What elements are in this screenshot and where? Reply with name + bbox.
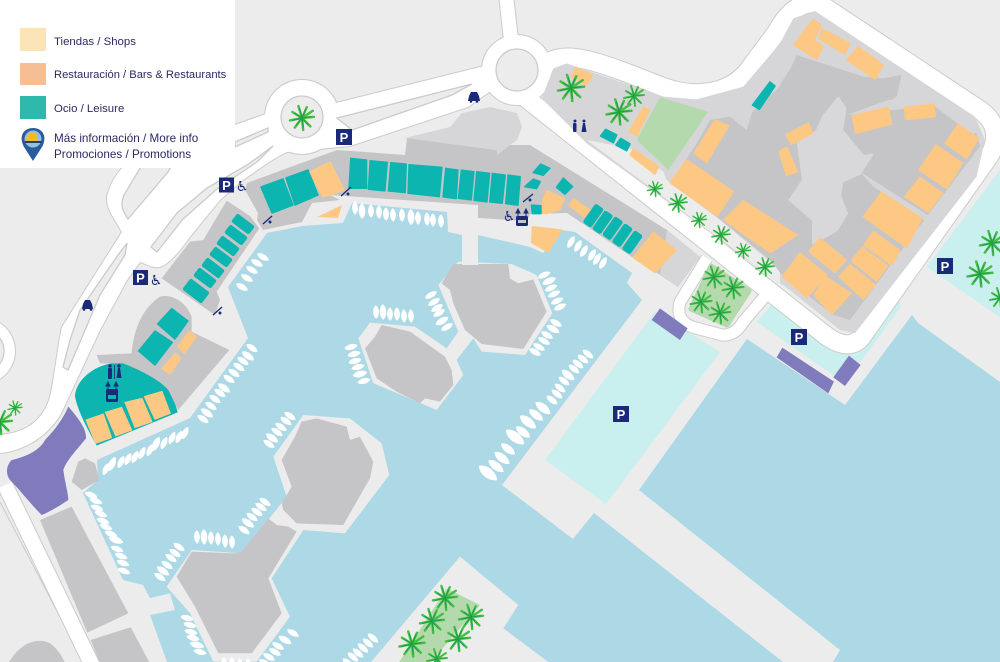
palm lawn — [691, 266, 749, 325]
island: south double hexagon — [142, 415, 389, 662]
small gray kiosk — [72, 458, 99, 490]
teal hall — [75, 363, 178, 446]
west row block — [162, 201, 259, 315]
north quay: gray paved strip — [245, 138, 700, 287]
parking sign: P — [795, 330, 804, 345]
parking sign accessible: ♿ — [150, 273, 162, 289]
icon: escalator — [523, 194, 533, 202]
south-west block — [7, 296, 229, 662]
icon: information kiosk — [516, 209, 528, 226]
parking sign accessible — [133, 270, 162, 289]
north quay units — [349, 158, 676, 273]
purple coach bays — [652, 308, 861, 393]
parking sign accessible: ♿ — [236, 179, 248, 195]
pier with palms — [370, 557, 550, 662]
icon: taxi — [82, 300, 93, 311]
orange units — [571, 19, 979, 314]
icon: info pin — [22, 128, 44, 161]
buildings base — [670, 55, 980, 320]
label: shops: Tiendas / Shops — [54, 36, 136, 48]
parking sign — [791, 329, 807, 345]
water basins — [83, 203, 1000, 662]
courtyard side paths — [847, 100, 977, 222]
parking sign accessible — [219, 178, 248, 195]
icon: information kiosk — [106, 382, 118, 402]
parking sign — [613, 406, 629, 422]
icon: toilets — [108, 364, 122, 379]
parking sign: P — [941, 259, 950, 274]
moored boats — [84, 201, 609, 662]
teal shops row — [349, 158, 642, 254]
legend panel — [0, 0, 235, 168]
palm walkway — [587, 140, 780, 283]
east block: shopping area — [542, 11, 985, 333]
north quay: light plaza — [405, 107, 700, 287]
west row teal units — [182, 213, 255, 304]
purple coach park — [7, 407, 86, 515]
orange row — [86, 331, 197, 443]
central courtyard — [790, 98, 872, 243]
label: restaurants: Restauración / Bars & Restaurants — [54, 69, 227, 81]
teal units — [601, 82, 775, 151]
icon: toilets — [573, 120, 586, 132]
swatch: shops — [20, 28, 46, 51]
icon: escalator — [263, 216, 272, 224]
parking sign — [336, 129, 352, 145]
gray ground — [97, 296, 229, 410]
icon: escalator — [341, 187, 351, 196]
icon: taxi — [468, 92, 480, 103]
swatch: restaurants — [20, 63, 46, 85]
parking sign: P — [617, 407, 626, 422]
label: leisure: Ocio / Leisure — [54, 103, 124, 115]
label: promotions: Promociones / Promotions — [54, 148, 191, 161]
parking sign accessible: P — [136, 270, 145, 286]
label: more info: Más información / More info — [54, 132, 199, 145]
orange units — [532, 191, 676, 273]
west block fill below roads — [522, 3, 995, 344]
icon: wheelchair: ♿ — [503, 209, 515, 225]
lower left buildings — [8, 507, 150, 662]
pier to hexagon island — [462, 230, 478, 265]
parking sign accessible: P — [222, 178, 231, 193]
teal units — [138, 308, 188, 365]
parking sign — [937, 258, 953, 274]
mint parking areas — [545, 170, 1000, 504]
north-west quay units — [261, 162, 344, 218]
island: north east hexagon — [358, 262, 552, 410]
swatch: leisure — [20, 96, 46, 119]
green lawn — [637, 97, 708, 170]
light paved ground — [542, 11, 985, 333]
icon: escalator — [213, 307, 222, 315]
parking sign: P — [340, 130, 349, 145]
